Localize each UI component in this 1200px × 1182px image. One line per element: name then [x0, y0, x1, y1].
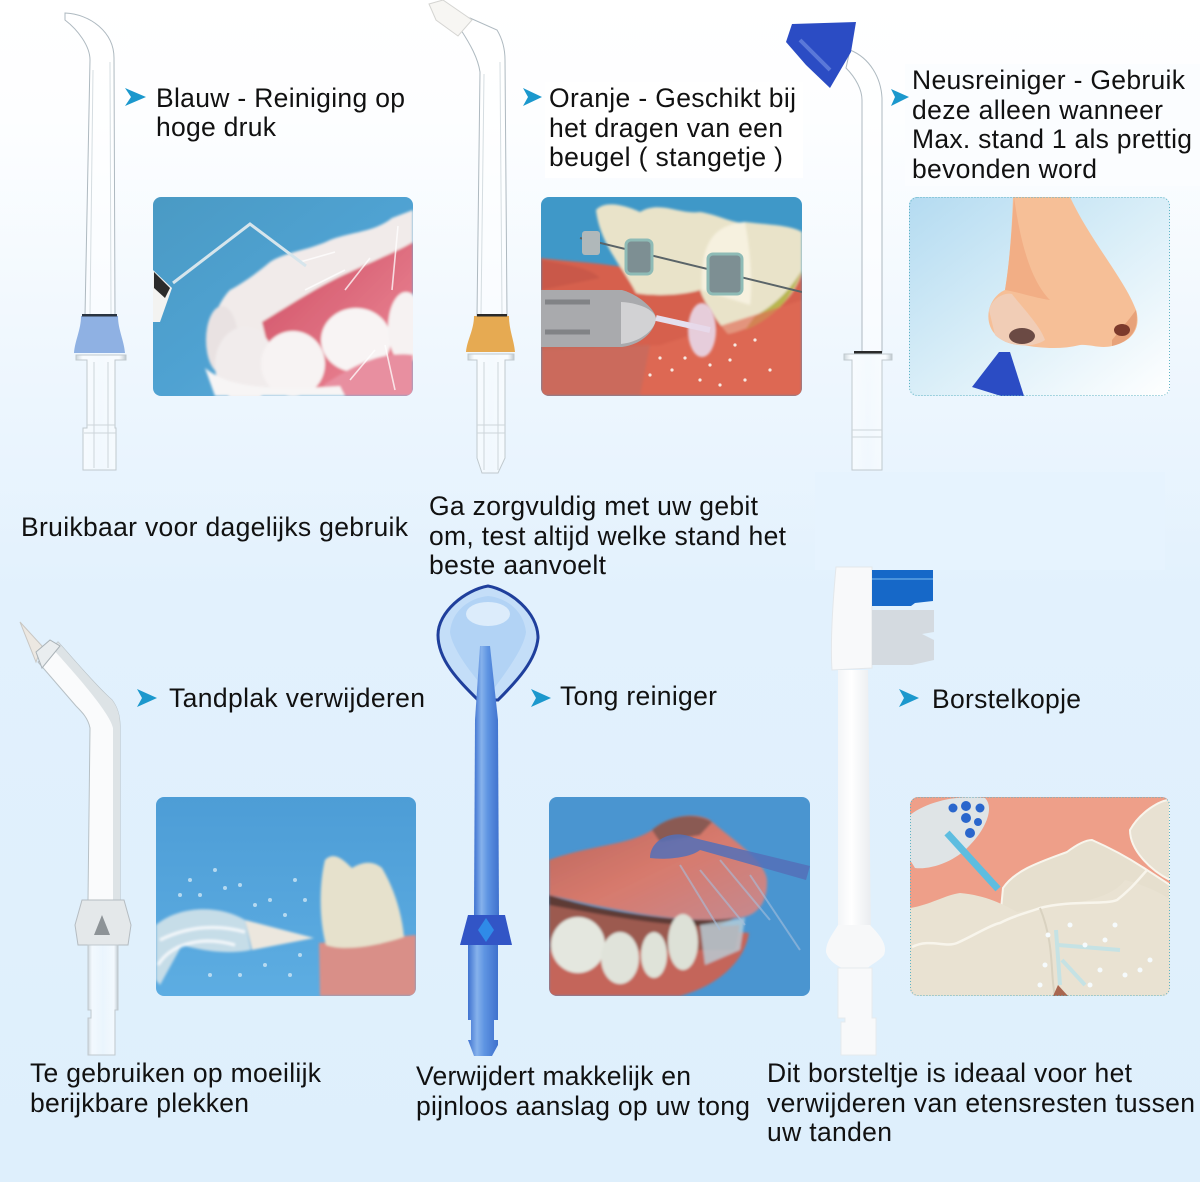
text: moeilijk bereikbaar: berijkbare plekken [30, 1088, 249, 1118]
text: neusreiniger: Neusreiniger - Gebruik [912, 65, 1186, 95]
arrow 6 [899, 689, 919, 707]
text: oranje: het dragen van een [549, 113, 783, 143]
photo: plaque tip [156, 797, 416, 996]
nozzle: orange braces [429, 0, 515, 473]
text: borsteltje: verwijderen van etensresten tussen [767, 1088, 1195, 1118]
text: oranje: Oranje - Geschikt bij [549, 83, 796, 113]
text: borsteltje: Dit borsteltje is ideaal voor het [767, 1058, 1133, 1088]
text: zorgvuldig: beste aanvoelt [429, 550, 607, 580]
text: neusreiniger: deze alleen wanneer [912, 95, 1163, 125]
photo: brush between teeth [910, 797, 1170, 996]
arrow 4 [137, 689, 157, 707]
text: zorgvuldig: Ga zorgvuldig met uw gebit [429, 491, 759, 521]
text: zorgvuldig: om, test altijd welke stand het [429, 521, 787, 551]
text: aanslag tong: pijnloos aanslag op uw tong [416, 1091, 750, 1121]
arrow 1 [125, 88, 146, 106]
photo: tongue [549, 797, 810, 996]
text: tong: Tong reiniger [560, 681, 717, 711]
text: borsteltje: uw tanden [767, 1117, 892, 1147]
text: blauw [156, 83, 405, 142]
text: blauw: hoge druk [156, 112, 277, 142]
text: blauw: Blauw - Reiniging op [156, 83, 405, 113]
photo: nose [909, 197, 1170, 396]
text: moeilijk bereikbaar: Te gebruiken op moeilijk [30, 1058, 322, 1088]
text: tandplak: Tandplak verwijderen [169, 683, 425, 713]
photo: high pressure cleaning [153, 197, 424, 403]
text: aanslag tong [416, 1061, 750, 1121]
text: zorgvuldig [429, 491, 787, 580]
text: aanslag tong: Verwijdert makkelijk en [416, 1061, 691, 1091]
arrow 2 [523, 88, 542, 106]
nozzle: nose cleaner [786, 22, 892, 470]
text: borstelkopje: Borstelkopje [932, 684, 1081, 714]
text: neusreiniger: Max. stand 1 als prettig [912, 124, 1192, 154]
photo: braces [541, 197, 802, 396]
arrow 3 [891, 89, 909, 106]
nozzle: brush head [826, 567, 934, 1055]
nozzle: blue high pressure [65, 13, 126, 470]
text: moeilijk bereikbaar [30, 1058, 322, 1118]
nozzle: tongue [438, 586, 538, 1056]
nozzle: plaque [20, 622, 131, 1055]
arrow 5 [531, 689, 551, 707]
text: oranje: beugel ( stangetje ) [549, 142, 783, 172]
text: dagelijks gebruik: Bruikbaar voor dagelijks gebruik [21, 512, 409, 542]
text: oranje [549, 83, 796, 172]
text: neusreiniger [912, 65, 1192, 184]
text: neusreiniger: bevonden word [912, 154, 1097, 184]
text: borsteltje [767, 1058, 1195, 1147]
